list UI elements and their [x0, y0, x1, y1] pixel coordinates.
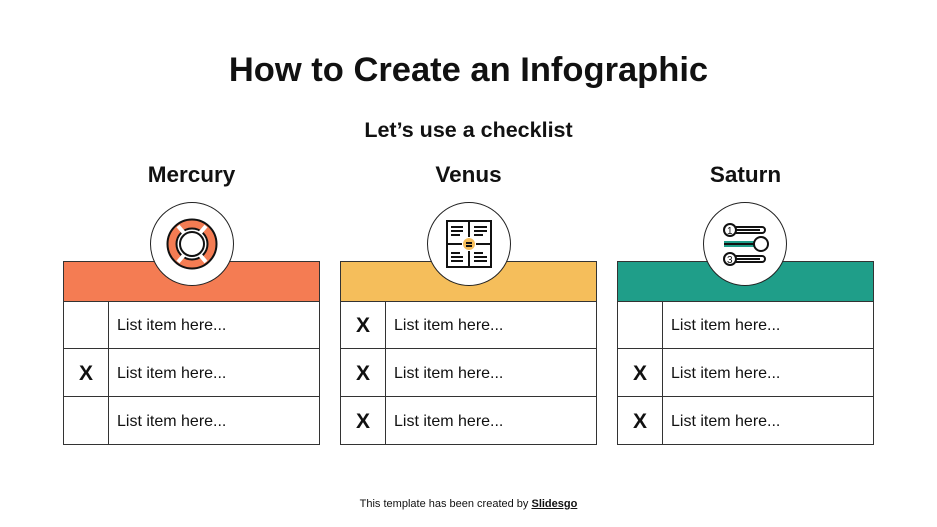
panel: Saturn	[617, 261, 874, 445]
panel: Venus: List item here...	[394, 413, 503, 430]
panel: Saturn: X	[633, 362, 647, 385]
icon: numbered list	[703, 202, 787, 286]
icon: numbered list: 1	[727, 226, 733, 237]
icon: lifebuoy	[150, 202, 234, 286]
heading: Mercury: Mercury	[148, 162, 235, 187]
heading: Venus: Venus	[435, 162, 502, 187]
panel: Mercury: List item here...	[117, 317, 226, 334]
icon: puzzle document	[427, 202, 511, 286]
icon: numbered list: 3	[727, 255, 733, 266]
panel: Venus: X	[356, 362, 370, 385]
panel: Venus: List item here...	[394, 365, 503, 382]
panel: Venus: List item here...	[394, 317, 503, 334]
panel: Saturn: List item here...	[671, 413, 780, 430]
footer: This template has been created by Slidesgo	[360, 498, 577, 510]
panel: Mercury	[63, 261, 320, 445]
panel: Saturn: List item here...	[671, 317, 780, 334]
panel: Venus: X	[356, 410, 370, 433]
subtitle: Let’s use a checklist	[364, 118, 573, 142]
panel: Saturn: List item here...	[671, 365, 780, 382]
title: How to Create an Infographic	[229, 51, 708, 89]
panel: Venus: X	[356, 314, 370, 337]
panel: Venus	[340, 261, 597, 445]
heading: Saturn: Saturn	[710, 162, 781, 187]
panel: Mercury: List item here...	[117, 365, 226, 382]
panel: Mercury: List item here...	[117, 413, 226, 430]
panel: Mercury: X	[79, 362, 93, 385]
panel: Saturn: X	[633, 410, 647, 433]
